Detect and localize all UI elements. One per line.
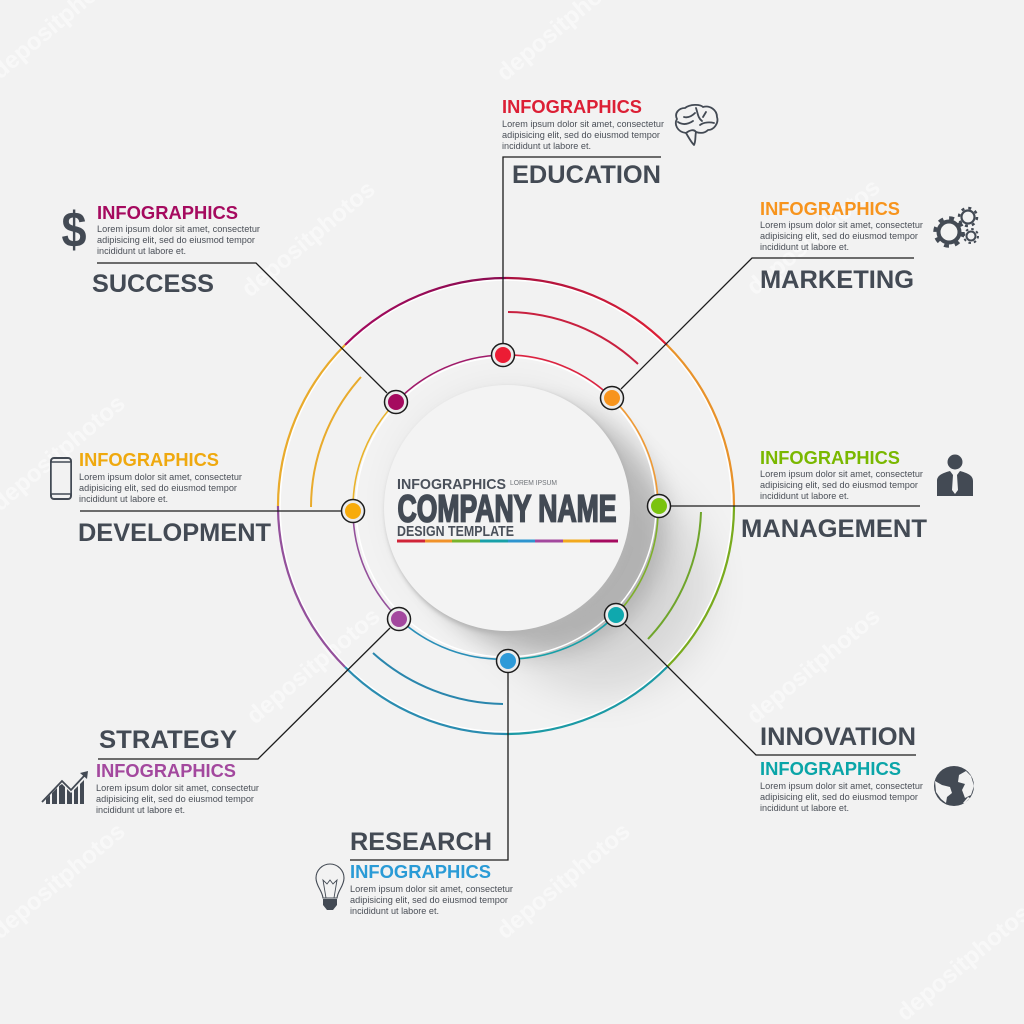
block: management [741, 448, 927, 543]
icon: person [937, 454, 973, 496]
rainbow bar [397, 540, 618, 542]
block: marketing: INFOGRAPHICS [760, 199, 900, 219]
block: strategy: STRATEGY [99, 726, 237, 754]
block: success: incididunt ut labore et. [97, 246, 186, 257]
block: management: INFOGRAPHICS [760, 448, 900, 468]
icon: light bulb [316, 864, 344, 910]
block: research: incididunt ut labore et. [350, 906, 439, 917]
block: strategy: INFOGRAPHICS [96, 761, 236, 781]
block: research: RESEARCH [350, 828, 492, 856]
block: innovation [760, 723, 924, 814]
leader lines [80, 157, 920, 860]
block: success [92, 203, 261, 298]
icon: globe [934, 766, 974, 806]
block: development: INFOGRAPHICS [79, 450, 219, 470]
block: innovation: Lorem ipsum dolor sit amet, consectetur [760, 781, 924, 792]
watermarks: depositphotos [242, 603, 386, 730]
icon: smartphone [51, 458, 71, 499]
block: marketing: incididunt ut labore et. [760, 242, 849, 253]
block: innovation: INNOVATION [760, 723, 916, 751]
block: development: DEVELOPMENT [78, 519, 271, 547]
watermarks: depositphotos [492, 818, 636, 945]
block: education: INFOGRAPHICS [502, 97, 642, 117]
block: education [502, 97, 665, 189]
block: innovation: adipisicing elit, sed do eiusmod tempor [760, 792, 919, 803]
block: success: INFOGRAPHICS [97, 203, 238, 223]
block: research: INFOGRAPHICS [350, 862, 491, 882]
block: innovation: INFOGRAPHICS [760, 759, 901, 779]
block: research: Lorem ipsum dolor sit amet, consectetur [350, 884, 514, 895]
block: management: adipisicing elit, sed do eiusmod tempor [760, 480, 919, 491]
block: research [350, 828, 514, 917]
center title block: LOREM IPSUM [510, 480, 557, 487]
block: innovation: incididunt ut labore et. [760, 803, 849, 814]
block: marketing [760, 199, 924, 294]
block: strategy: Lorem ipsum dolor sit amet, consectetur [96, 783, 260, 794]
block: strategy [96, 726, 260, 816]
block: research: adipisicing elit, sed do eiusmod tempor [350, 895, 509, 906]
block: marketing: Lorem ipsum dolor sit amet, consectetur [760, 220, 924, 231]
icon: brain [676, 105, 717, 145]
block: success: adipisicing elit, sed do eiusmod tempor [97, 235, 256, 246]
block: management: Lorem ipsum dolor sit amet, consectetur [760, 469, 924, 480]
block: development: incididunt ut labore et. [79, 494, 168, 505]
block: development: adipisicing elit, sed do eiusmod tempor [79, 483, 238, 494]
inner ring [353, 355, 658, 659]
block: development [78, 450, 271, 547]
watermarks: depositphotos [742, 603, 886, 730]
center title block [397, 476, 618, 542]
center disc [384, 385, 632, 634]
watermarks: depositphotos [742, 174, 886, 301]
icon: rising chart [42, 771, 88, 804]
nodes [342, 344, 670, 672]
block: management: MANAGEMENT [741, 515, 927, 543]
block: strategy: adipisicing elit, sed do eiusmod tempor [96, 794, 255, 805]
center title block: COMPANY NAME [398, 488, 616, 530]
watermarks: depositphotos [237, 176, 381, 303]
block: strategy: incididunt ut labore et. [96, 805, 185, 816]
block: education: EDUCATION [512, 161, 661, 189]
block: success: Lorem ipsum dolor sit amet, consectetur [97, 224, 261, 235]
block: education: adipisicing elit, sed do eiusmod tempor [502, 130, 661, 141]
block: marketing: MARKETING [760, 266, 914, 294]
middle arcs [311, 312, 701, 704]
center title block: DESIGN TEMPLATE [397, 524, 514, 540]
icon: dollar sign: $ [62, 202, 87, 258]
block: success: SUCCESS [92, 270, 214, 298]
outer ring [278, 278, 734, 734]
block: education: incididunt ut labore et. [502, 141, 591, 152]
block: management: incididunt ut labore et. [760, 491, 849, 502]
disc shadow [417, 405, 665, 653]
block: education: Lorem ipsum dolor sit amet, consectetur [502, 119, 665, 130]
icon: gears [935, 208, 978, 246]
block: marketing: adipisicing elit, sed do eiusmod tempor [760, 231, 919, 242]
center title block: INFOGRAPHICS [397, 476, 506, 493]
block: development: Lorem ipsum dolor sit amet, consectetur [79, 472, 243, 483]
